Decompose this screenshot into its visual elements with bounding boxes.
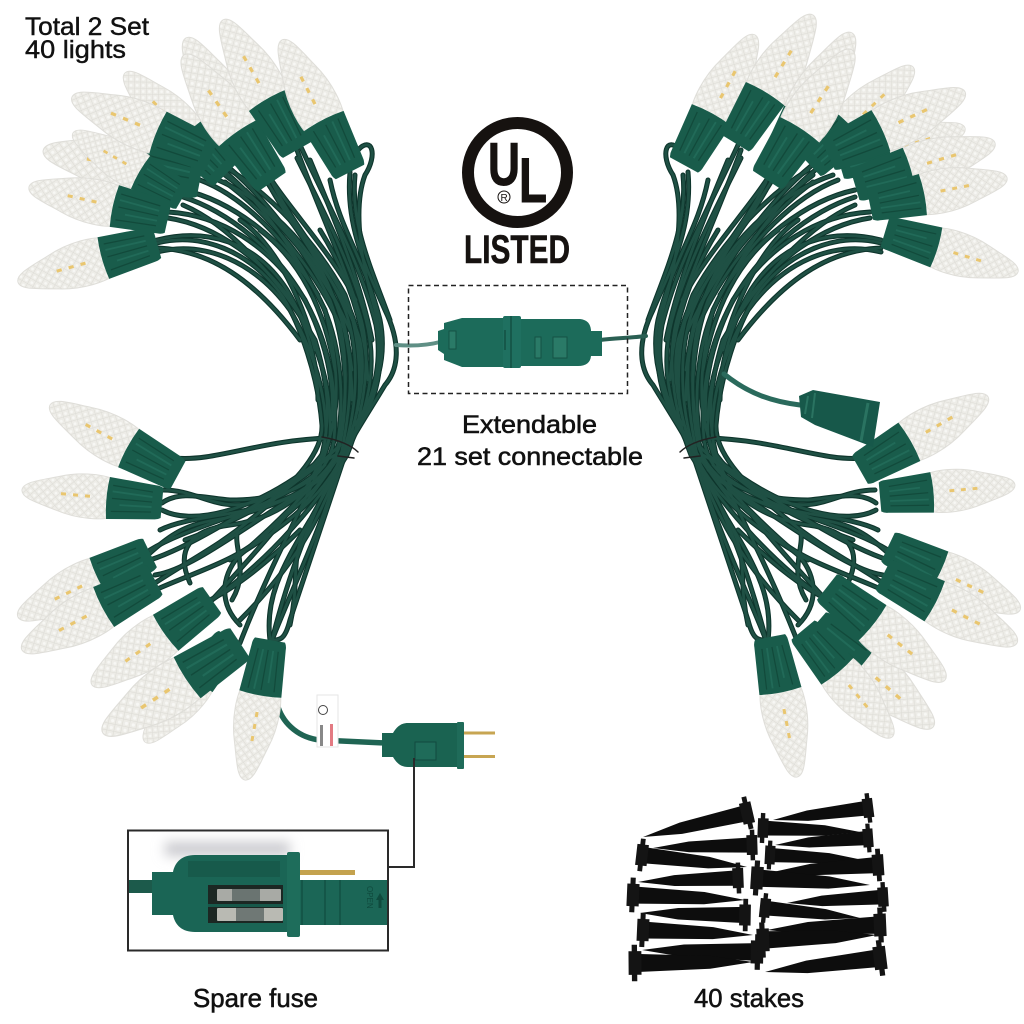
caption: spare fuse: Spare fuse — [193, 983, 318, 1013]
right wire bundle — [642, 145, 888, 643]
heading: total count — [25, 13, 149, 64]
bulbs: lower right cluster — [748, 377, 1024, 781]
heading: total count: Total 2 Set — [25, 13, 149, 41]
panel: spare fuse inset: OPEN — [365, 886, 374, 909]
UL listed logo: U — [488, 131, 520, 198]
extension cords to the connectors — [278, 336, 800, 743]
panel: inline connector with dashed frame — [408, 286, 628, 394]
UL listed logo: L — [519, 146, 547, 216]
UL listed logo: LISTED — [464, 228, 570, 272]
heading: total count: 40 lights — [25, 36, 126, 64]
stakes — [626, 793, 889, 990]
socket connector on the right cord — [799, 390, 880, 447]
left wire bundle — [150, 145, 396, 643]
caption: extendable: 21 set connectable — [417, 443, 643, 471]
bulbs: lower left cluster — [8, 385, 292, 784]
panel: spare fuse inset — [128, 830, 388, 950]
caption: extendable: Extendable — [462, 411, 597, 439]
caption: stakes: 40 stakes — [694, 983, 804, 1013]
caption: extendable — [417, 411, 643, 471]
UL listed logo: R — [500, 193, 508, 204]
bulbs: top right cluster — [664, 3, 1024, 293]
leader line from plug to inset — [388, 758, 414, 867]
UL listed logo — [464, 123, 570, 272]
bulbs: top left cluster — [12, 8, 371, 304]
plug — [382, 722, 495, 769]
UL tag on the cord — [317, 695, 338, 747]
